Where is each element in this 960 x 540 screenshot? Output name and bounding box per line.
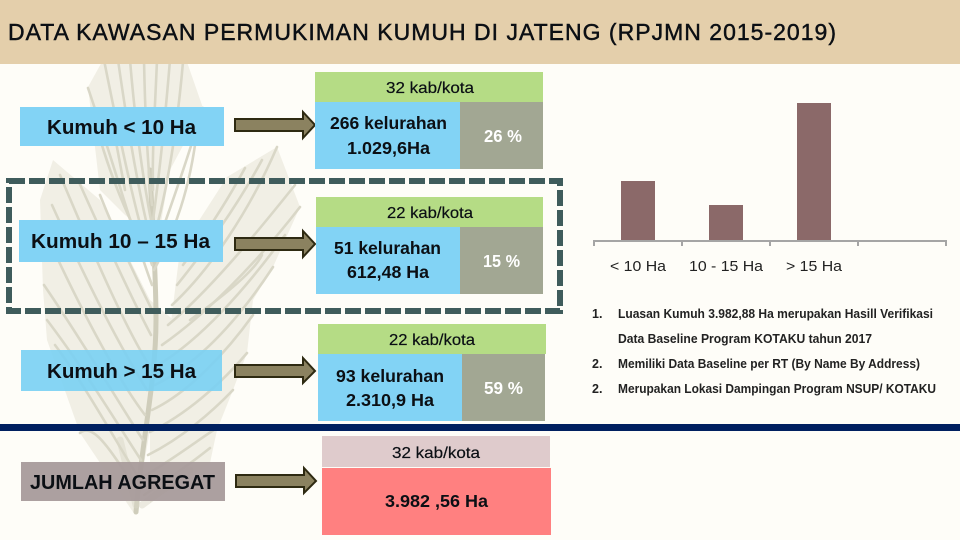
row: Jumlah Agregat: [21, 436, 551, 535]
category label: aggregate: [21, 462, 225, 501]
title: DATA KAWASAN PERMUKIMAN KUMUH DI JATENG (RPJMN 2015-2019): [8, 19, 836, 45]
panel: data 10 to 15 Ha: 15 %: [483, 251, 520, 271]
category label: aggregate: JUMLAH AGREGAT: [30, 471, 215, 494]
notes list: 2.: [592, 357, 602, 371]
panel: data under 10 Ha: 1.029,6Ha: [347, 138, 430, 158]
panel: data under 10 Ha: 266 kelurahan: [330, 113, 447, 133]
notes list: Luasan Kumuh 3.982,88 Ha merupakan Hasill Verifikasi: [618, 307, 933, 321]
panel: data over 15 Ha: 2.310,9 Ha: [346, 390, 434, 410]
row: Kumuh 10 - 15 Ha: [19, 197, 543, 294]
category label: under 10 Ha: [20, 107, 224, 146]
notes list: Memiliki Data Baseline per RT (By Name By Address): [618, 357, 920, 371]
category label: under 10 Ha: Kumuh < 10 Ha: [47, 116, 197, 139]
notes list: Data Baseline Program KOTAKU tahun 2017: [618, 332, 872, 346]
axis labels: < 10 Ha: [610, 258, 667, 275]
panel: data 10 to 15 Ha: [316, 197, 543, 294]
row: Kumuh < 10 Ha: [20, 72, 543, 169]
panel: data over 15 Ha: 22 kab/kota: [389, 332, 475, 349]
notes list: Merupakan Lokasi Dampingan Program NSUP/ KOTAKU: [618, 382, 936, 396]
panel: data 10 to 15 Ha: 51 kelurahan: [334, 238, 441, 258]
axis labels: 10 - 15 Ha: [689, 258, 764, 275]
axis: [594, 241, 946, 246]
row: Kumuh > 15 Ha: [21, 324, 546, 421]
panel: data 10 to 15 Ha: 22 kab/kota: [387, 205, 473, 222]
panel: data under 10 Ha: 26 %: [484, 126, 522, 146]
decorative feather background: [40, 60, 300, 515]
arrow: [235, 231, 315, 257]
category label: 10 to 15 Ha: [19, 220, 223, 262]
arrow: [235, 112, 315, 138]
axis labels: > 15 Ha: [786, 258, 843, 275]
navy separator line: [0, 424, 960, 431]
notes list: 2.: [592, 382, 602, 396]
category label: over 15 Ha: Kumuh > 15 Ha: [47, 360, 197, 383]
panel: data 10 to 15 Ha: 612,48 Ha: [347, 262, 429, 282]
panel: aggregate data: 32 kab/kota: [392, 445, 480, 462]
axis labels: [610, 258, 843, 275]
bar chart: [594, 103, 946, 275]
panel: data over 15 Ha: [318, 324, 546, 421]
panel: data over 15 Ha: 93 kelurahan: [336, 366, 444, 386]
panel: aggregate data: 3.982 ,56 Ha: [385, 491, 488, 511]
notes list: 1.: [592, 307, 602, 321]
category label: over 15 Ha: [21, 350, 222, 391]
arrow: [236, 468, 316, 493]
header band: [0, 0, 960, 64]
category label: 10 to 15 Ha: Kumuh 10 – 15 Ha: [31, 230, 211, 253]
notes list: [592, 307, 936, 396]
panel: data under 10 Ha: 32 kab/kota: [386, 80, 474, 97]
panel: data over 15 Ha: 59 %: [484, 378, 523, 398]
arrow: [235, 358, 315, 383]
panel: aggregate data: [322, 436, 551, 535]
highlight dashed frame: [9, 181, 560, 311]
bars: [621, 103, 831, 240]
panel: data under 10 Ha: [315, 72, 543, 169]
